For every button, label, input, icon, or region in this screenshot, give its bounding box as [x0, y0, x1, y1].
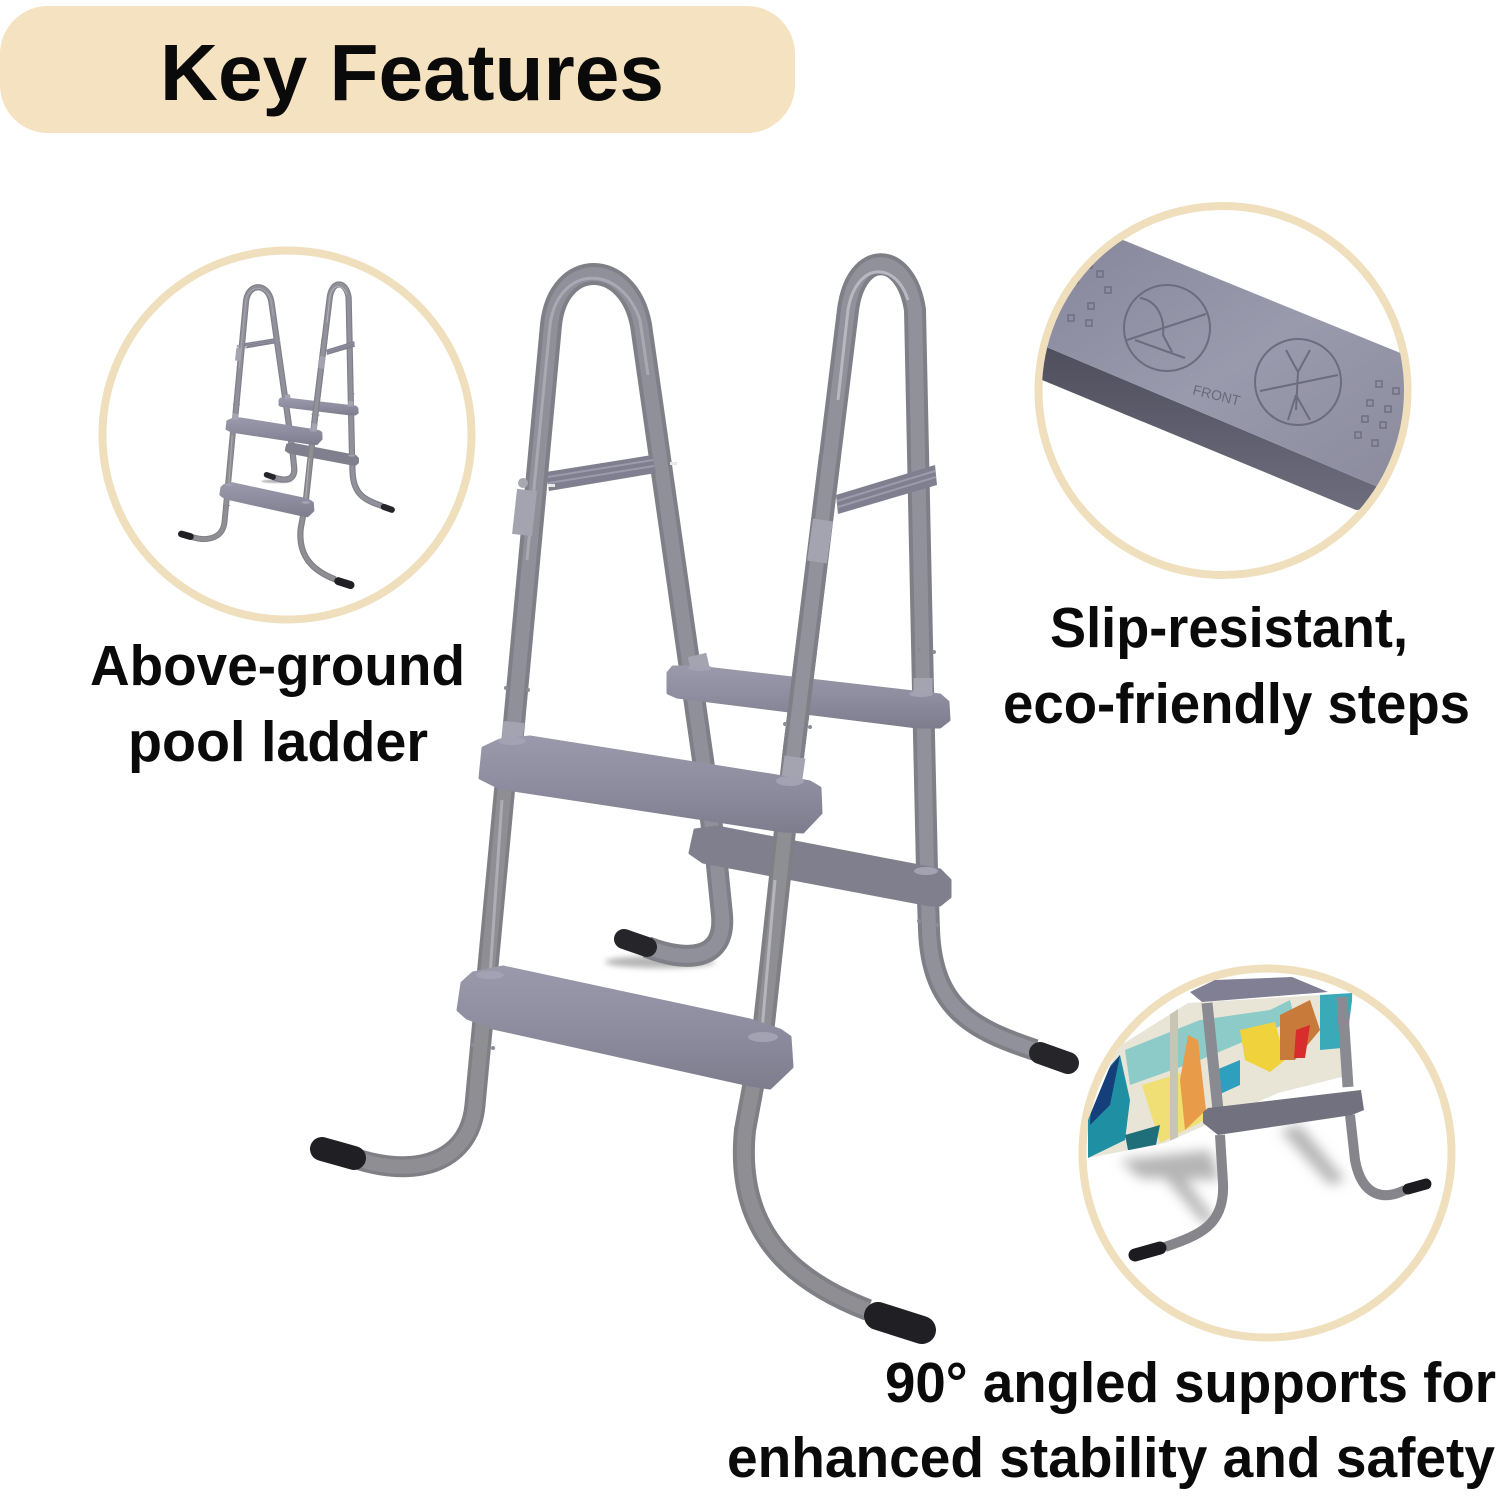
panel: angled supports on pool	[1080, 968, 1452, 1338]
title text: Key Features	[160, 28, 664, 117]
caption: slip-resistant steps: eco-friendly steps	[1003, 672, 1470, 736]
no-diving symbol	[1124, 285, 1341, 425]
caption: above-ground ladder: Above-ground	[90, 634, 465, 698]
circle ring	[1038, 206, 1408, 575]
circle ring	[1082, 968, 1452, 1338]
caption: slip-resistant steps	[1003, 596, 1470, 736]
small ladder image	[181, 285, 392, 585]
pool and ladder scene	[1080, 977, 1426, 1255]
circle ring	[102, 250, 472, 620]
caption: slip-resistant steps: Slip-resistant,	[1050, 596, 1408, 660]
step close-up	[1030, 240, 1420, 510]
panel: above-ground ladder	[102, 250, 472, 620]
caption: angled supports	[727, 1351, 1496, 1490]
caption: above-ground ladder	[90, 634, 465, 774]
grip diamonds	[1068, 262, 1399, 446]
panel: slip-resistant step close-up	[1030, 206, 1420, 575]
main ladder illustration	[322, 264, 1068, 1330]
title banner	[0, 6, 795, 133]
embossed label: FRONT	[1191, 381, 1242, 409]
caption: above-ground ladder: pool ladder	[128, 710, 428, 774]
